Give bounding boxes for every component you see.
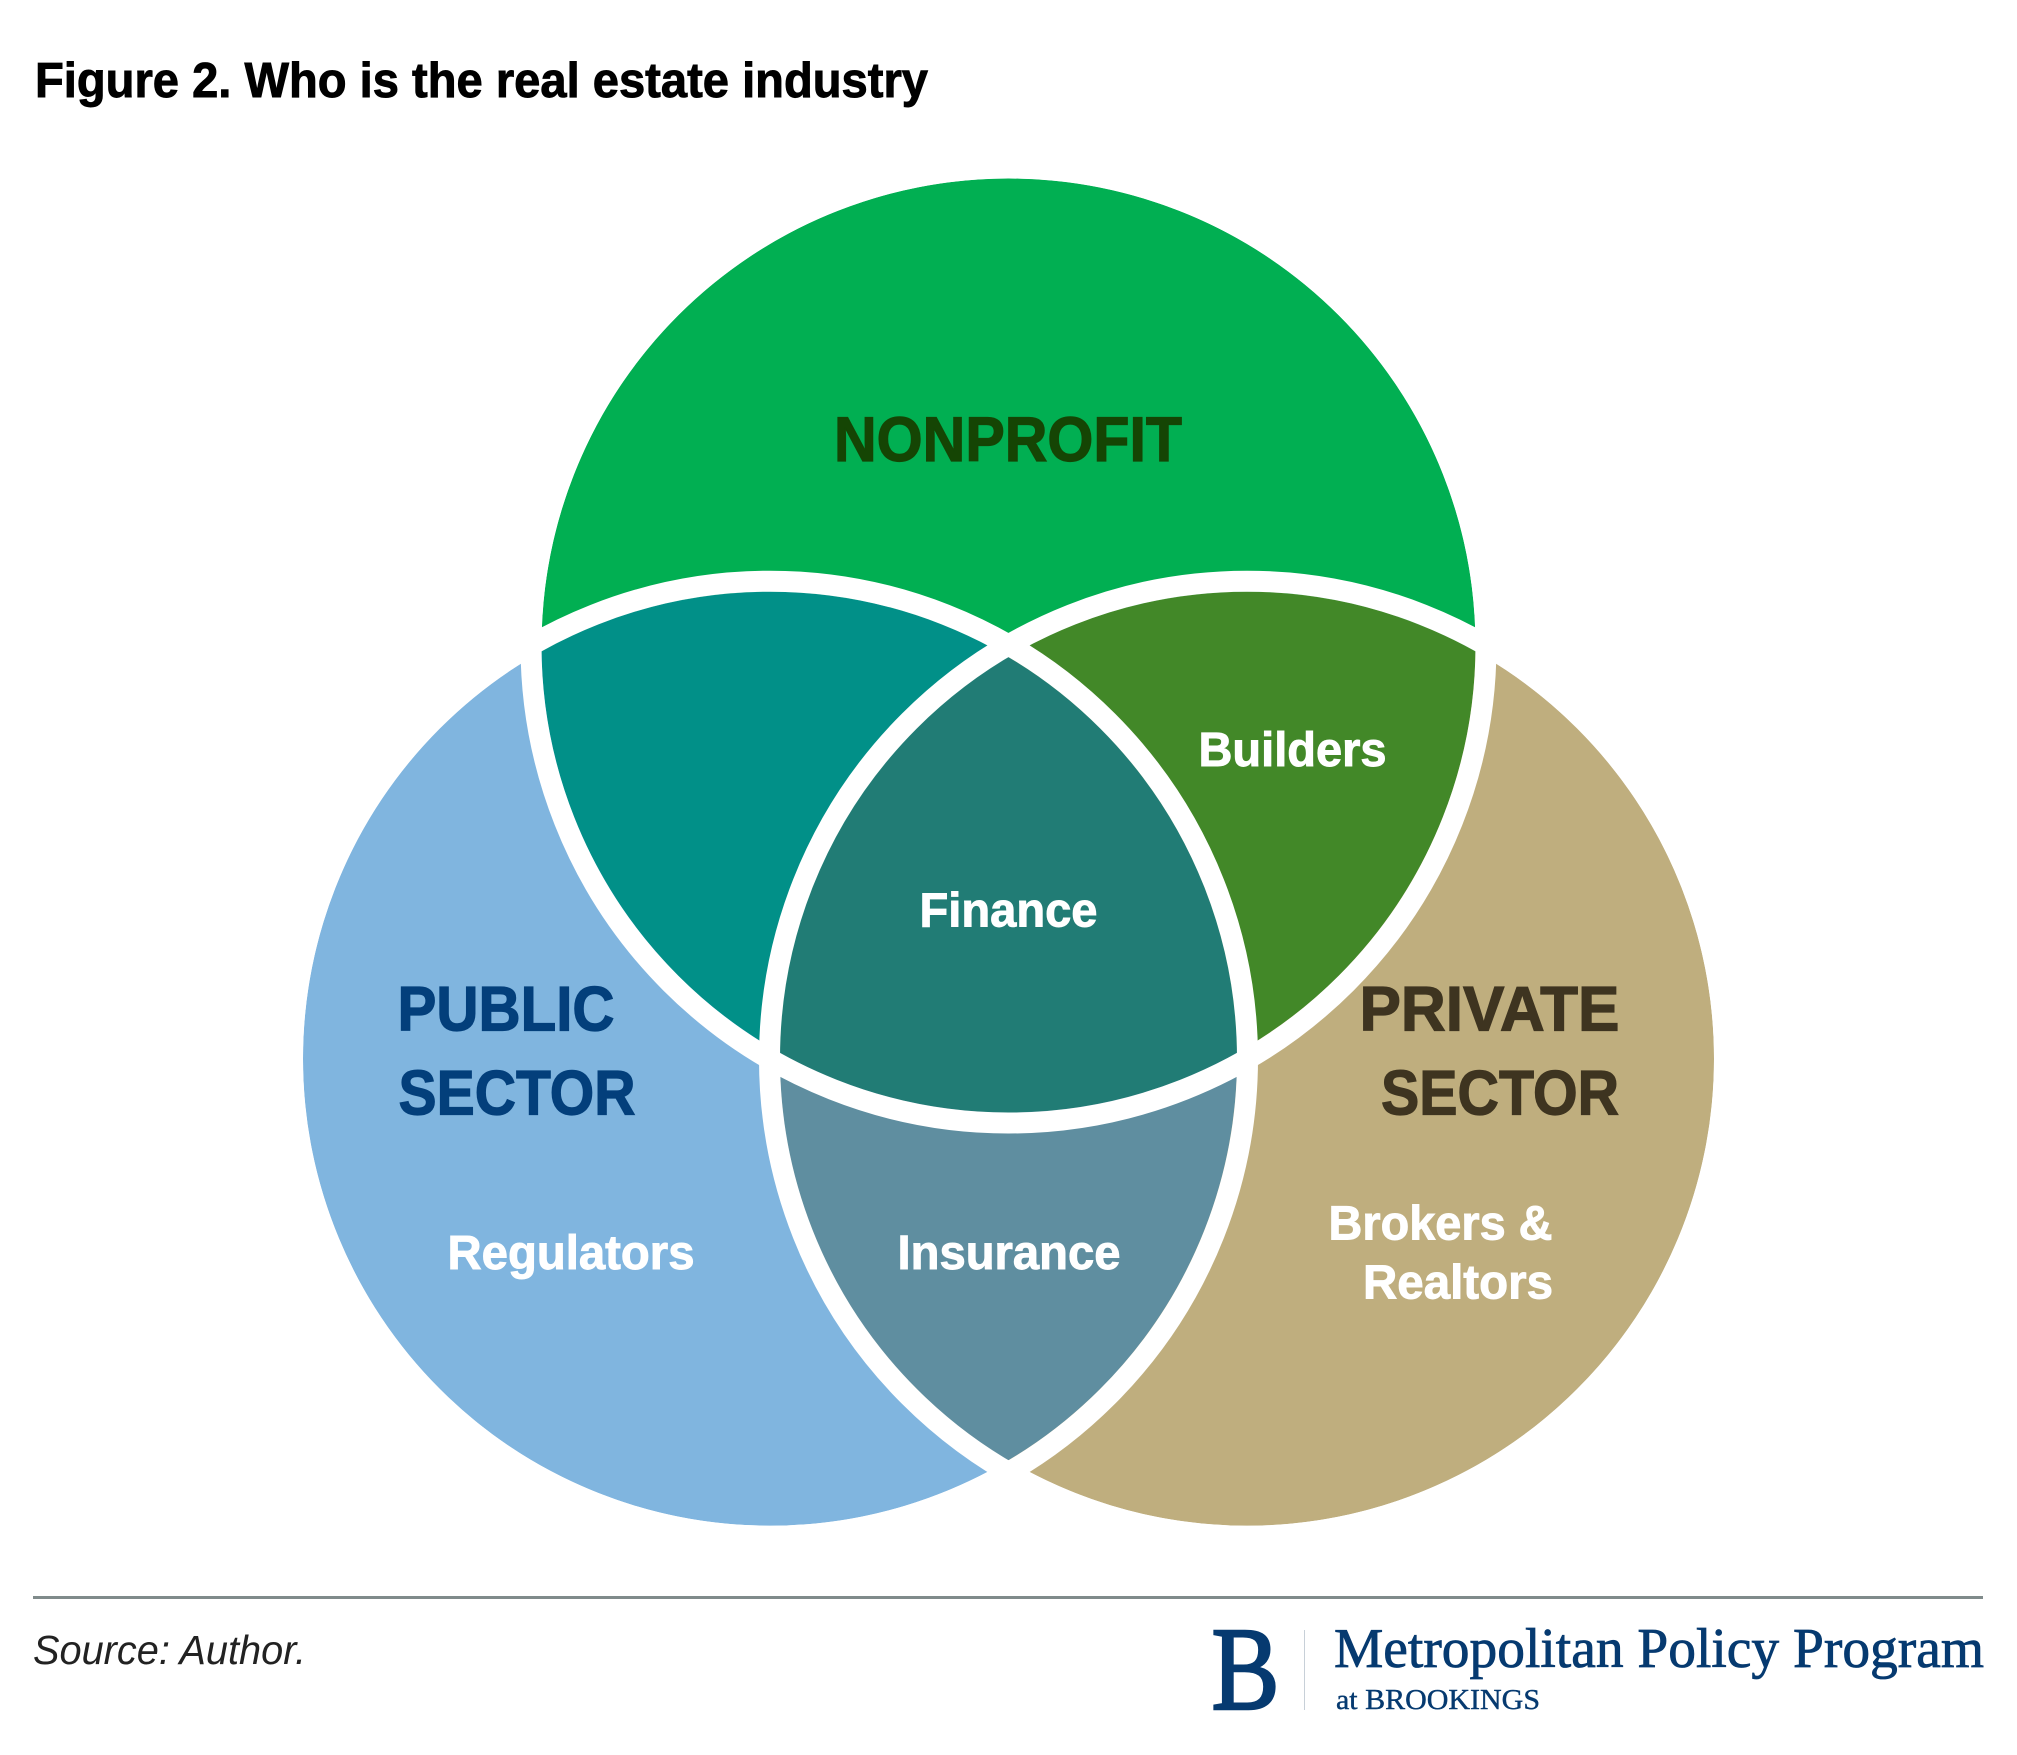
white ring: private <box>770 581 1724 1536</box>
label: regulators: Regulators <box>448 1227 694 1280</box>
circle: nonprofit <box>542 178 1476 1112</box>
label: insurance: Insurance <box>898 1227 1120 1280</box>
overlap: nonprofit and public <box>542 592 1008 1045</box>
label: nonprofit: NONPROFIT <box>834 405 1182 475</box>
label: brokers and realtors <box>1328 1198 1553 1310</box>
source note: Source: Author. <box>33 1627 306 1673</box>
logo subline: at BROOKINGS <box>1336 1685 1540 1716</box>
label: brokers and realtors: Brokers & <box>1328 1198 1552 1250</box>
label: brokers and realtors: Realtors <box>1363 1256 1553 1310</box>
label: private sector <box>1360 974 1620 1128</box>
logo name: Metropolitan Policy Program <box>1334 1618 1984 1680</box>
white ring: public <box>292 581 1248 1536</box>
label: public sector: PUBLIC <box>398 974 614 1044</box>
logo: metropolitan policy program at brookings <box>1212 1603 1984 1735</box>
overlap: public and private <box>780 657 1237 1460</box>
label: public sector <box>398 974 636 1128</box>
title: Figure 2. Who is the real estate industry <box>35 54 928 108</box>
label: private sector: PRIVATE <box>1360 974 1620 1044</box>
overlap: nonprofit and private <box>786 592 1476 1046</box>
overlap: center <box>780 658 1237 1112</box>
logo divider <box>1304 1630 1305 1710</box>
circle: private sector <box>780 592 1714 1526</box>
logo mark: B <box>1212 1603 1280 1735</box>
venn diagram <box>292 168 1724 1536</box>
label: builders: Builders <box>1198 724 1386 777</box>
label: public sector: SECTOR <box>398 1058 636 1128</box>
label: private sector: SECTOR <box>1381 1058 1619 1128</box>
white ring: nonprofit <box>531 168 1486 1123</box>
circle: public sector <box>303 592 1237 1526</box>
label: finance: Finance <box>920 884 1098 938</box>
